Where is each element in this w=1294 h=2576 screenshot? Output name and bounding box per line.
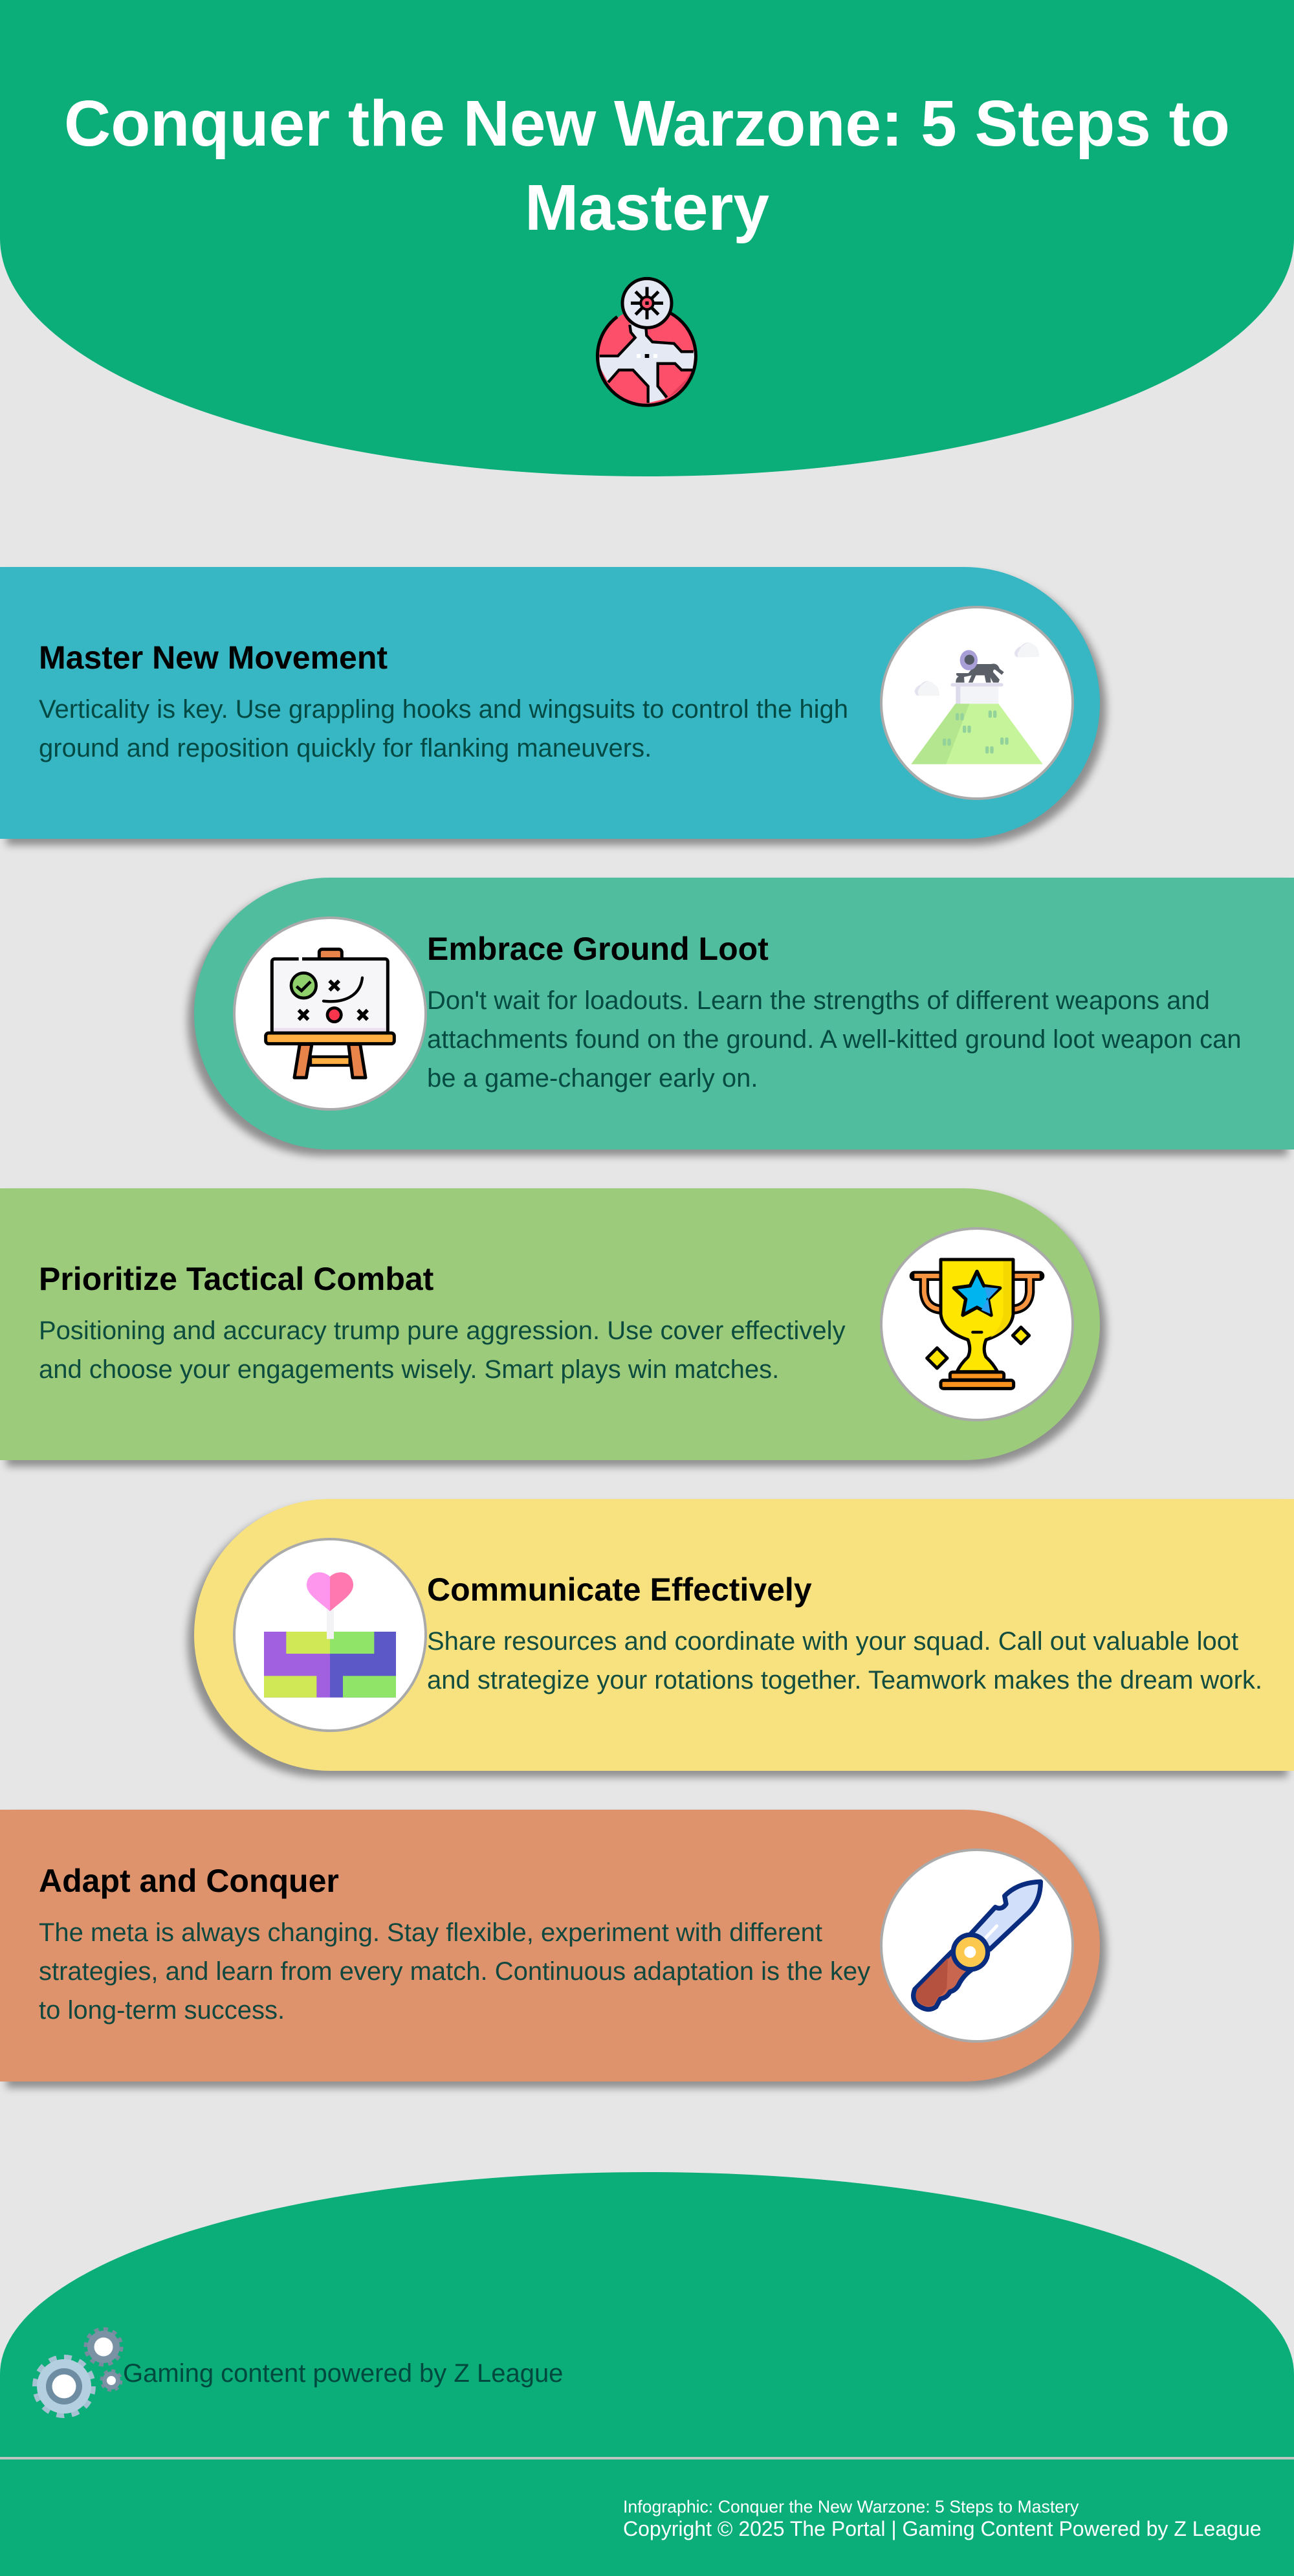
panel: step 4	[194, 1499, 1294, 1771]
footer panel	[0, 2172, 1294, 2576]
title: Mastery	[525, 172, 769, 244]
heading: step 2: Embrace Ground Loot	[427, 931, 769, 967]
body: step 5: strategies, and learn from every match. Continuous adaptation is the key	[39, 1957, 870, 1986]
body: step 4: Share resources and coordinate with your squad. Call out valuable loot	[427, 1627, 1238, 1656]
panel: step 2	[194, 878, 1294, 1149]
text block: step 4	[427, 1571, 1262, 1694]
heading: step 5: Adapt and Conquer	[39, 1863, 339, 1899]
text block: step 5	[39, 1863, 870, 2025]
body: step 2: Don't wait for loadouts. Learn the strengths of different weapons and	[427, 986, 1210, 1015]
icon: map with heart pin	[264, 1572, 396, 1698]
text block: step 1	[39, 639, 848, 762]
body: step 3: Positioning and accuracy trump pure aggression. Use cover effectively	[39, 1316, 846, 1345]
panel: step 5	[0, 1810, 1100, 2082]
body: step 5: to long-term success.	[39, 1996, 285, 2025]
body: step 2: be a game-changer early on.	[427, 1064, 758, 1093]
footer divider	[0, 2457, 1294, 2459]
body: step 1	[39, 695, 848, 762]
body: step 2: attachments found on the ground. A well-kitted ground loot weapon can	[427, 1025, 1242, 1054]
icon circle: step 3	[880, 1227, 1074, 1421]
text block: step 2	[427, 931, 1242, 1093]
body: step 2	[427, 986, 1242, 1093]
icon circle: step 4	[233, 1538, 427, 1732]
icon circle: step 5	[880, 1849, 1074, 2043]
body: step 5: The meta is always changing. Stay flexible, experiment with different	[39, 1918, 822, 1947]
body: step 1: ground and reposition quickly for flanking maneuvers.	[39, 734, 652, 762]
icon: cracked globe with virus	[595, 277, 697, 407]
icon: trophy	[910, 1258, 1044, 1390]
title	[64, 87, 1230, 244]
panel: step 3	[0, 1188, 1100, 1460]
footer tagline: Gaming content powered by Z League	[123, 2359, 563, 2388]
text block: step 3	[39, 1261, 846, 1384]
body: step 5	[39, 1918, 870, 2025]
footer infographic credit: Infographic: Conquer the New Warzone: 5 Steps to Mastery	[623, 2497, 1079, 2516]
heading: step 4: Communicate Effectively	[427, 1571, 812, 1608]
heading: step 3: Prioritize Tactical Combat	[39, 1261, 433, 1297]
icon: tactics easel	[264, 948, 396, 1080]
body: step 3	[39, 1316, 846, 1384]
body: step 3: and choose your engagements wisely. Smart plays win matches.	[39, 1355, 779, 1384]
footer copyright: Copyright © 2025 The Portal | Gaming Content Powered by Z League	[623, 2517, 1262, 2540]
icon: knife	[911, 1880, 1043, 2012]
heading: step 1: Master New Movement	[39, 639, 388, 676]
body: step 4: and strategize your rotations together. Teamwork makes the dream work.	[427, 1666, 1262, 1694]
title: Conquer the New Warzone: 5 Steps to	[64, 87, 1230, 160]
body: step 4	[427, 1627, 1262, 1694]
panel: step 1	[0, 567, 1100, 839]
header panel	[0, 0, 1294, 476]
body: step 1: Verticality is key. Use grappling hooks and wingsuits to control the high	[39, 695, 848, 724]
icon: hill lookout	[911, 642, 1043, 764]
icon circle: step 2	[233, 916, 427, 1111]
icon circle: step 1	[880, 606, 1074, 800]
